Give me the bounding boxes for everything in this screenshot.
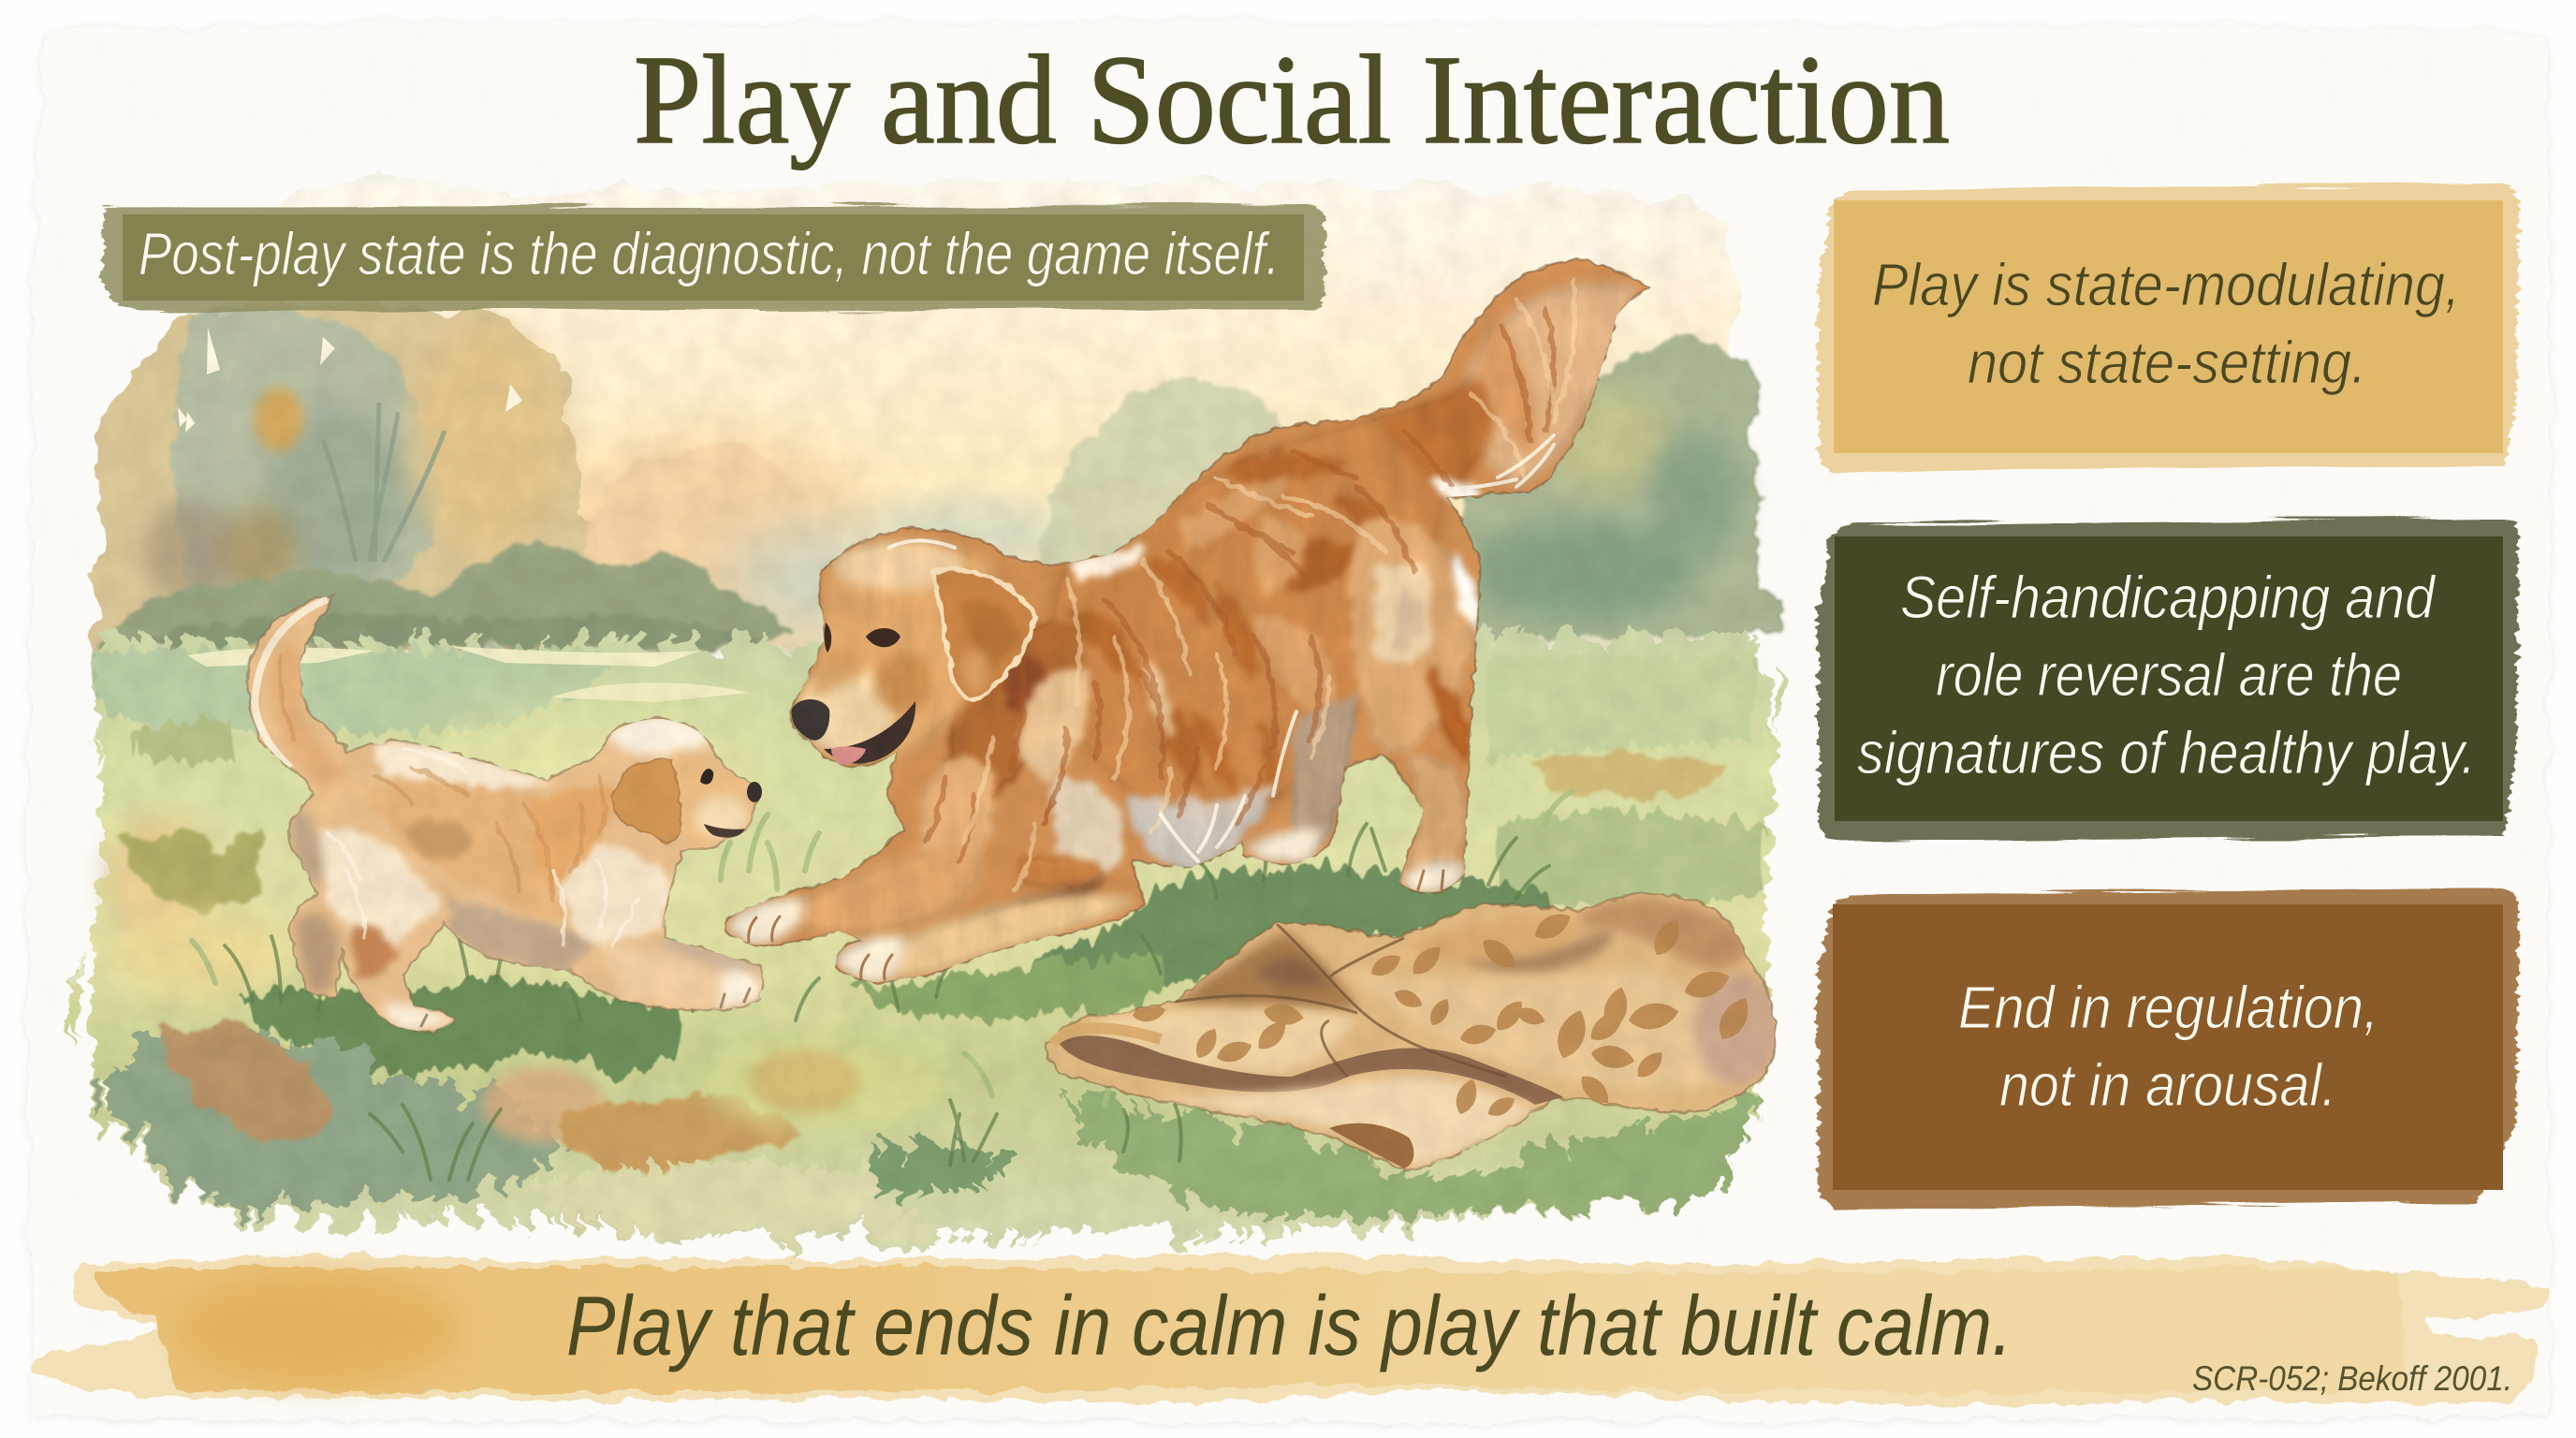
tail base russet: [1376, 374, 1496, 496]
far hind shade: [295, 912, 339, 992]
painted fur: [725, 281, 1638, 983]
light fur strokes: [936, 281, 1574, 889]
lower-left green wash: [104, 1034, 558, 1204]
snout bridge shade: [810, 652, 866, 697]
near hind russet: [351, 926, 398, 980]
rump taupe: [292, 813, 323, 889]
front leg one: [749, 847, 984, 936]
teal upper meadow: [90, 651, 609, 733]
card 3 wash edge: [1818, 888, 2519, 1210]
card 3 core: [1833, 904, 2503, 1190]
title: Play and Social Interaction: [634, 30, 1950, 170]
panel: card 2: [1818, 518, 2519, 842]
card 1 wash edge: [1818, 183, 2519, 473]
rim of left roll: [1052, 1028, 1161, 1044]
cream centre flame: [1144, 660, 1172, 735]
rump cream: [315, 828, 440, 944]
band wash edge: [101, 204, 1325, 311]
source citation: SCR-052; Bekoff 2001.: [2192, 1359, 2512, 1398]
dark fur strokes: [927, 309, 1554, 861]
back patches: [1067, 452, 1397, 693]
group: flame patches dark: [1067, 452, 1397, 800]
tan cluster: [558, 1094, 797, 1173]
sunset glow: [552, 440, 871, 627]
grey belly: [1128, 782, 1278, 871]
highlight flecks: [178, 328, 522, 433]
back tan: [360, 784, 596, 922]
panel: watercolor illustration: [89, 179, 1784, 1245]
right tan patch: [1535, 753, 1727, 799]
forehead light: [833, 542, 964, 591]
flank base: [1047, 403, 1450, 815]
band text: Post-play state is the diagnostic, not the game itself.: [139, 220, 1280, 287]
card 2 text: signatures of healthy play.: [1857, 719, 2476, 786]
flap fold shadow: [1460, 927, 1612, 974]
elbow shade: [964, 875, 1105, 941]
head cream: [608, 714, 711, 756]
panel: card 1: [1818, 183, 2519, 473]
hind thigh cream: [1373, 562, 1432, 664]
banner core wash: [94, 1266, 2410, 1393]
big dog nose: [792, 699, 829, 741]
puppy: [247, 595, 763, 1032]
group: left trees: [98, 301, 594, 651]
group: light tan flames: [1179, 477, 1337, 740]
front panel: [1086, 1009, 1357, 1073]
right lilac wash: [1694, 974, 1778, 1086]
head base: [796, 538, 997, 760]
mane light: [918, 754, 995, 889]
ochre trunk wash: [225, 506, 300, 599]
pale grass blades: [192, 791, 1573, 1105]
mid flank: [1254, 616, 1337, 740]
belly shade: [449, 899, 599, 974]
band core: [123, 214, 1304, 301]
fold lines: [1175, 924, 1507, 1077]
group: grass washes: [90, 646, 1764, 1241]
meadow highlights: [187, 646, 749, 702]
tree shade: [1470, 520, 1694, 623]
bottom panel: [1151, 1077, 1535, 1166]
silhouette: [724, 259, 1647, 982]
tree shade right: [1647, 431, 1741, 562]
hind thigh taupe: [1395, 590, 1423, 655]
toe lines: [749, 871, 1443, 979]
cream tail feathers: [889, 435, 1554, 861]
yellow meadow centre: [412, 712, 786, 824]
painted puppy fur: [255, 599, 763, 1032]
orange autumn spot: [255, 388, 303, 451]
sapling stems: [323, 403, 445, 562]
tail orange: [271, 644, 346, 786]
callout band: post-play: [101, 204, 1325, 311]
elbow russet: [1020, 855, 1109, 891]
more flank flames: [1189, 580, 1280, 800]
card 2 text: Self-handicapping and: [1900, 564, 2437, 631]
fur strokes tan: [280, 655, 604, 899]
tan flap top right: [1582, 899, 1748, 970]
left tan patch: [108, 814, 211, 946]
teal mist: [721, 524, 945, 637]
front leg: [599, 944, 754, 1009]
takeaway banner: [31, 1254, 2547, 1405]
big dog tongue: [831, 746, 866, 765]
panel: card 3: [1818, 888, 2519, 1210]
chest lower cream: [1052, 776, 1123, 885]
olive highlight: [1535, 389, 1676, 492]
upper panel: [1404, 917, 1582, 960]
bottom roll dark: [1329, 1123, 1413, 1168]
card 1 text: not state-setting.: [1968, 329, 2366, 396]
peach wash: [482, 1067, 604, 1142]
puppy eye: [700, 769, 713, 785]
puppy mouth: [704, 824, 745, 838]
big dog ear: [933, 569, 1035, 699]
tail mid orange: [1479, 309, 1537, 459]
right panel tan: [1348, 964, 1764, 1091]
big golden dog: [724, 259, 1647, 983]
brown lower-left wash: [165, 1024, 332, 1147]
shadow under big dog front: [842, 955, 1164, 1019]
grass field: [89, 637, 1778, 1245]
dark hill shadow: [112, 615, 768, 651]
cheek shade: [875, 653, 931, 713]
tan side wash: [407, 323, 566, 557]
front leg two: [861, 894, 1137, 983]
shoulder orange: [530, 785, 618, 889]
leaf pattern: [1131, 907, 1756, 1121]
muzzle: [695, 796, 747, 837]
lower mid dark green: [861, 1141, 1011, 1194]
flank patch: [402, 820, 473, 861]
far orange trees: [571, 439, 843, 646]
dark throat: [1004, 651, 1047, 712]
right lower meadow: [1488, 814, 1764, 913]
flank streak: [1155, 693, 1203, 788]
banner ochre bloom: [178, 1273, 459, 1386]
big dog eyes: [825, 623, 900, 653]
banner text: Play that ends in calm is play that built calm.: [566, 1280, 2012, 1373]
hind lower leg: [1404, 749, 1468, 866]
face: [671, 749, 756, 847]
big dog mouth: [824, 701, 915, 764]
tree mass: [1460, 339, 1784, 646]
puppy nose: [747, 782, 762, 802]
pale bottom wash: [534, 1165, 936, 1241]
muzzle: [798, 667, 896, 756]
ear shading: [959, 598, 1020, 679]
card 3 text: End in regulation,: [1958, 974, 2378, 1041]
puppy ear: [611, 758, 681, 843]
card 1 text: Play is state-modulating,: [1872, 251, 2460, 318]
ochre wash right of puppy: [749, 1049, 861, 1113]
folded blanket: [1046, 892, 1778, 1171]
tail light edge: [255, 599, 328, 768]
hind far leg: [1292, 693, 1357, 861]
white rump tufts: [1430, 476, 1488, 637]
left olive grass: [120, 824, 262, 907]
card 3 text: not in arousal.: [1999, 1051, 2336, 1119]
dark grass shadow under puppy: [245, 977, 683, 1077]
tree shade: [267, 403, 407, 590]
under-blanket green: [1067, 1091, 1764, 1216]
yellow lower left: [112, 913, 290, 997]
tail colour: [1460, 283, 1638, 487]
left tube inner dark: [1060, 1035, 1563, 1105]
card 1 core: [1834, 200, 2503, 453]
far left hill: [101, 545, 788, 646]
rump dark patch: [1269, 540, 1357, 591]
neck shade: [946, 623, 1086, 824]
sky wash: [215, 179, 1734, 655]
cream mane flame: [1020, 667, 1091, 782]
paws: [384, 970, 763, 1032]
fur strokes cream: [328, 749, 637, 946]
central dark pocket: [1175, 932, 1357, 1011]
chest cream: [560, 843, 674, 944]
card 2 text: role reversal are the: [1936, 641, 2402, 709]
paws: [725, 829, 1465, 983]
brown lower wash: [140, 501, 243, 604]
banner outer wash: [31, 1254, 2547, 1405]
puppy toe lines: [421, 989, 750, 1026]
grass blades: [225, 824, 1549, 1180]
pocket deep shade: [1254, 957, 1329, 988]
shoulder cream edge: [1073, 543, 1147, 579]
hind thigh: [1350, 521, 1474, 758]
far front leg: [660, 932, 760, 978]
blanket base: [1046, 892, 1776, 1171]
hind russet: [1427, 669, 1468, 763]
ear light: [962, 647, 988, 692]
silhouette: [247, 595, 762, 1031]
shadow under big dog: [1020, 866, 1551, 989]
olive top-left patch: [133, 719, 233, 762]
blanket painted folds: [1052, 899, 1778, 1168]
right meadow green: [1488, 655, 1760, 758]
lower light wash: [702, 1043, 945, 1129]
card 2 wash edge: [1818, 518, 2519, 842]
card 2 core: [1835, 536, 2503, 821]
tree wash: sage: [174, 307, 439, 618]
mid distance trees: [1030, 380, 1460, 646]
mid distance haze: [880, 496, 1067, 571]
group: right trees: [1460, 339, 1784, 646]
upper back light: [1179, 477, 1306, 599]
tree wash: tan: [98, 301, 594, 651]
back cream edge: [374, 740, 552, 789]
